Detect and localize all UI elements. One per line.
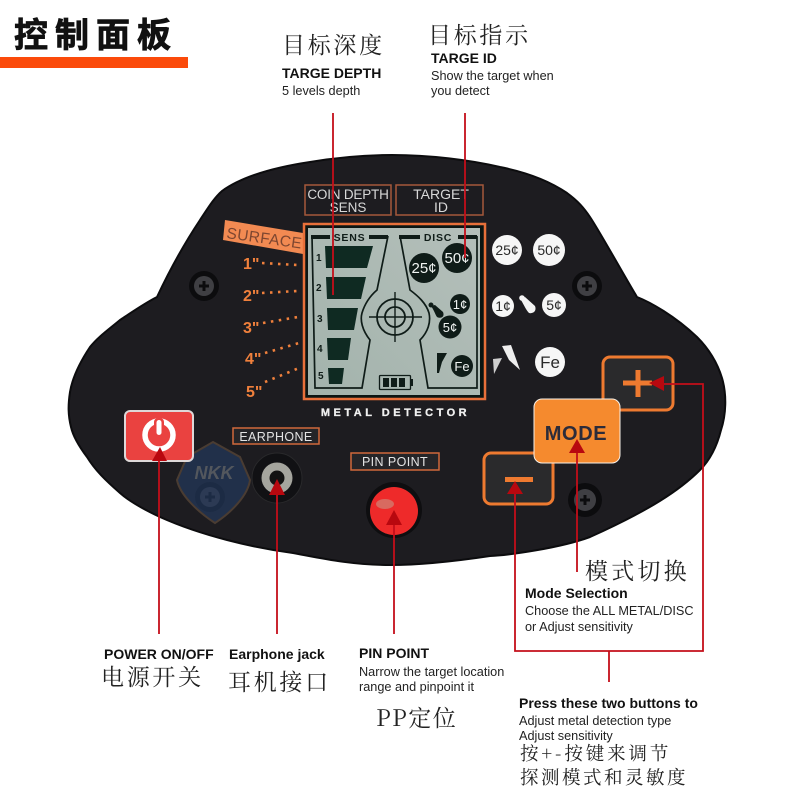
target icons on lcd: 25¢	[411, 260, 437, 277]
earphone jack	[252, 453, 302, 503]
text: pin point: PP定位	[376, 700, 457, 733]
text: target id	[428, 17, 554, 98]
text: pin point: Narrow the target location	[359, 665, 504, 679]
text: pin point: range and pinpoint it	[359, 680, 474, 694]
panel: control panel body	[69, 155, 725, 565]
depth scale: 2"	[243, 288, 259, 305]
lcd screen	[304, 224, 485, 399]
label: metal detector: METAL DETECTOR	[321, 407, 470, 419]
mode button	[534, 399, 620, 463]
label: coin depth sens	[305, 185, 391, 215]
target icons on lcd: 1¢	[453, 297, 467, 312]
screws	[189, 271, 602, 517]
text: pin point	[359, 645, 504, 733]
depth scale: 3"	[243, 320, 259, 337]
arrow: target id	[464, 113, 466, 258]
target icons on lcd: 5¢	[443, 320, 457, 335]
watermark shield	[177, 442, 250, 523]
watermark shield: NKK	[194, 463, 235, 483]
power button	[125, 411, 193, 461]
pin point button	[366, 482, 422, 538]
depth scale: 5"	[246, 384, 262, 401]
text: target depth	[282, 27, 385, 98]
target icons on lcd: 50¢	[444, 250, 470, 267]
text: pin point: PIN POINT	[359, 645, 429, 661]
depth bars: 3	[317, 314, 323, 325]
battery	[380, 376, 413, 390]
arrow: power	[152, 447, 167, 634]
coin icons: 1¢	[495, 298, 511, 314]
label: coin depth sens: COIN DEPTH	[307, 187, 389, 202]
crosshair target	[369, 292, 422, 342]
coin icons	[492, 234, 566, 377]
text: power: POWER ON/OFF	[104, 646, 214, 662]
arrow: mode	[569, 439, 585, 572]
label: coin depth sens: SENS	[330, 200, 366, 215]
earphone label: EARPHONE	[239, 430, 313, 444]
coin icons: 50¢	[537, 242, 561, 258]
depth bars: 1	[316, 253, 322, 264]
title: 控制面板	[14, 17, 178, 55]
text: mode selection: Mode Selection	[525, 585, 628, 601]
lcd screen: DISC	[424, 232, 452, 244]
plus button	[603, 357, 673, 410]
text: mode selection	[525, 553, 694, 634]
label: target id: ID	[434, 199, 448, 215]
coin icons: 25¢	[495, 242, 519, 258]
coin icons: 5¢	[546, 297, 562, 313]
text: mode selection: or Adjust sensitivity	[525, 620, 634, 634]
lcd screen: SENS	[334, 232, 365, 244]
pin point label: PIN POINT	[362, 455, 428, 469]
label: target id	[396, 185, 483, 215]
mode button: MODE	[545, 423, 607, 445]
text: target id: 目标指示	[428, 17, 531, 50]
depth bars: 5	[318, 371, 324, 382]
text: press buttons: 探测模式和灵敏度	[520, 764, 688, 790]
depth scale: 1"	[243, 256, 259, 273]
text: power: 电源开关	[101, 659, 204, 692]
arrow: plus and minus bracket	[507, 376, 703, 682]
title	[0, 17, 188, 68]
pin point label	[351, 453, 439, 470]
text: earphone: 耳机接口	[228, 664, 331, 697]
text: earphone	[228, 646, 331, 697]
text: target depth: TARGE DEPTH	[282, 65, 381, 81]
text: press buttons: 按+-按键来调节	[520, 740, 671, 766]
arrow: target depth	[332, 113, 334, 295]
depth scale	[243, 256, 299, 401]
text: earphone: Earphone jack	[229, 646, 325, 662]
target icons on lcd	[409, 243, 473, 377]
text: power	[101, 646, 214, 692]
depth scale: 4"	[245, 351, 261, 368]
arrow: earphone	[269, 479, 285, 634]
text: mode selection: Choose the ALL METAL/DISC	[525, 604, 694, 618]
target icons on lcd: Fe	[454, 359, 470, 374]
coin icons: Fe	[540, 353, 560, 372]
label: target id: TARGET	[413, 186, 469, 202]
text: mode selection: 模式切换	[585, 553, 690, 586]
text: press buttons: Press these two buttons to	[519, 695, 698, 711]
depth bars: 4	[317, 344, 323, 355]
text: target id: TARGE ID	[431, 50, 497, 66]
text: press buttons: Adjust sensitivity	[519, 729, 613, 743]
text: target id: you detect	[431, 84, 490, 98]
text: target depth: 5 levels depth	[282, 84, 360, 98]
text: press buttons	[519, 695, 698, 790]
depth bars	[316, 246, 373, 384]
label: surface: SURFACE	[225, 225, 303, 253]
minus button	[484, 453, 553, 504]
text: press buttons: Adjust metal detection type	[519, 714, 671, 728]
text: target depth: 目标深度	[282, 27, 385, 60]
depth bars: 2	[316, 283, 322, 294]
arrow: pin point	[386, 510, 402, 634]
text: target id: Show the target when	[431, 69, 554, 83]
